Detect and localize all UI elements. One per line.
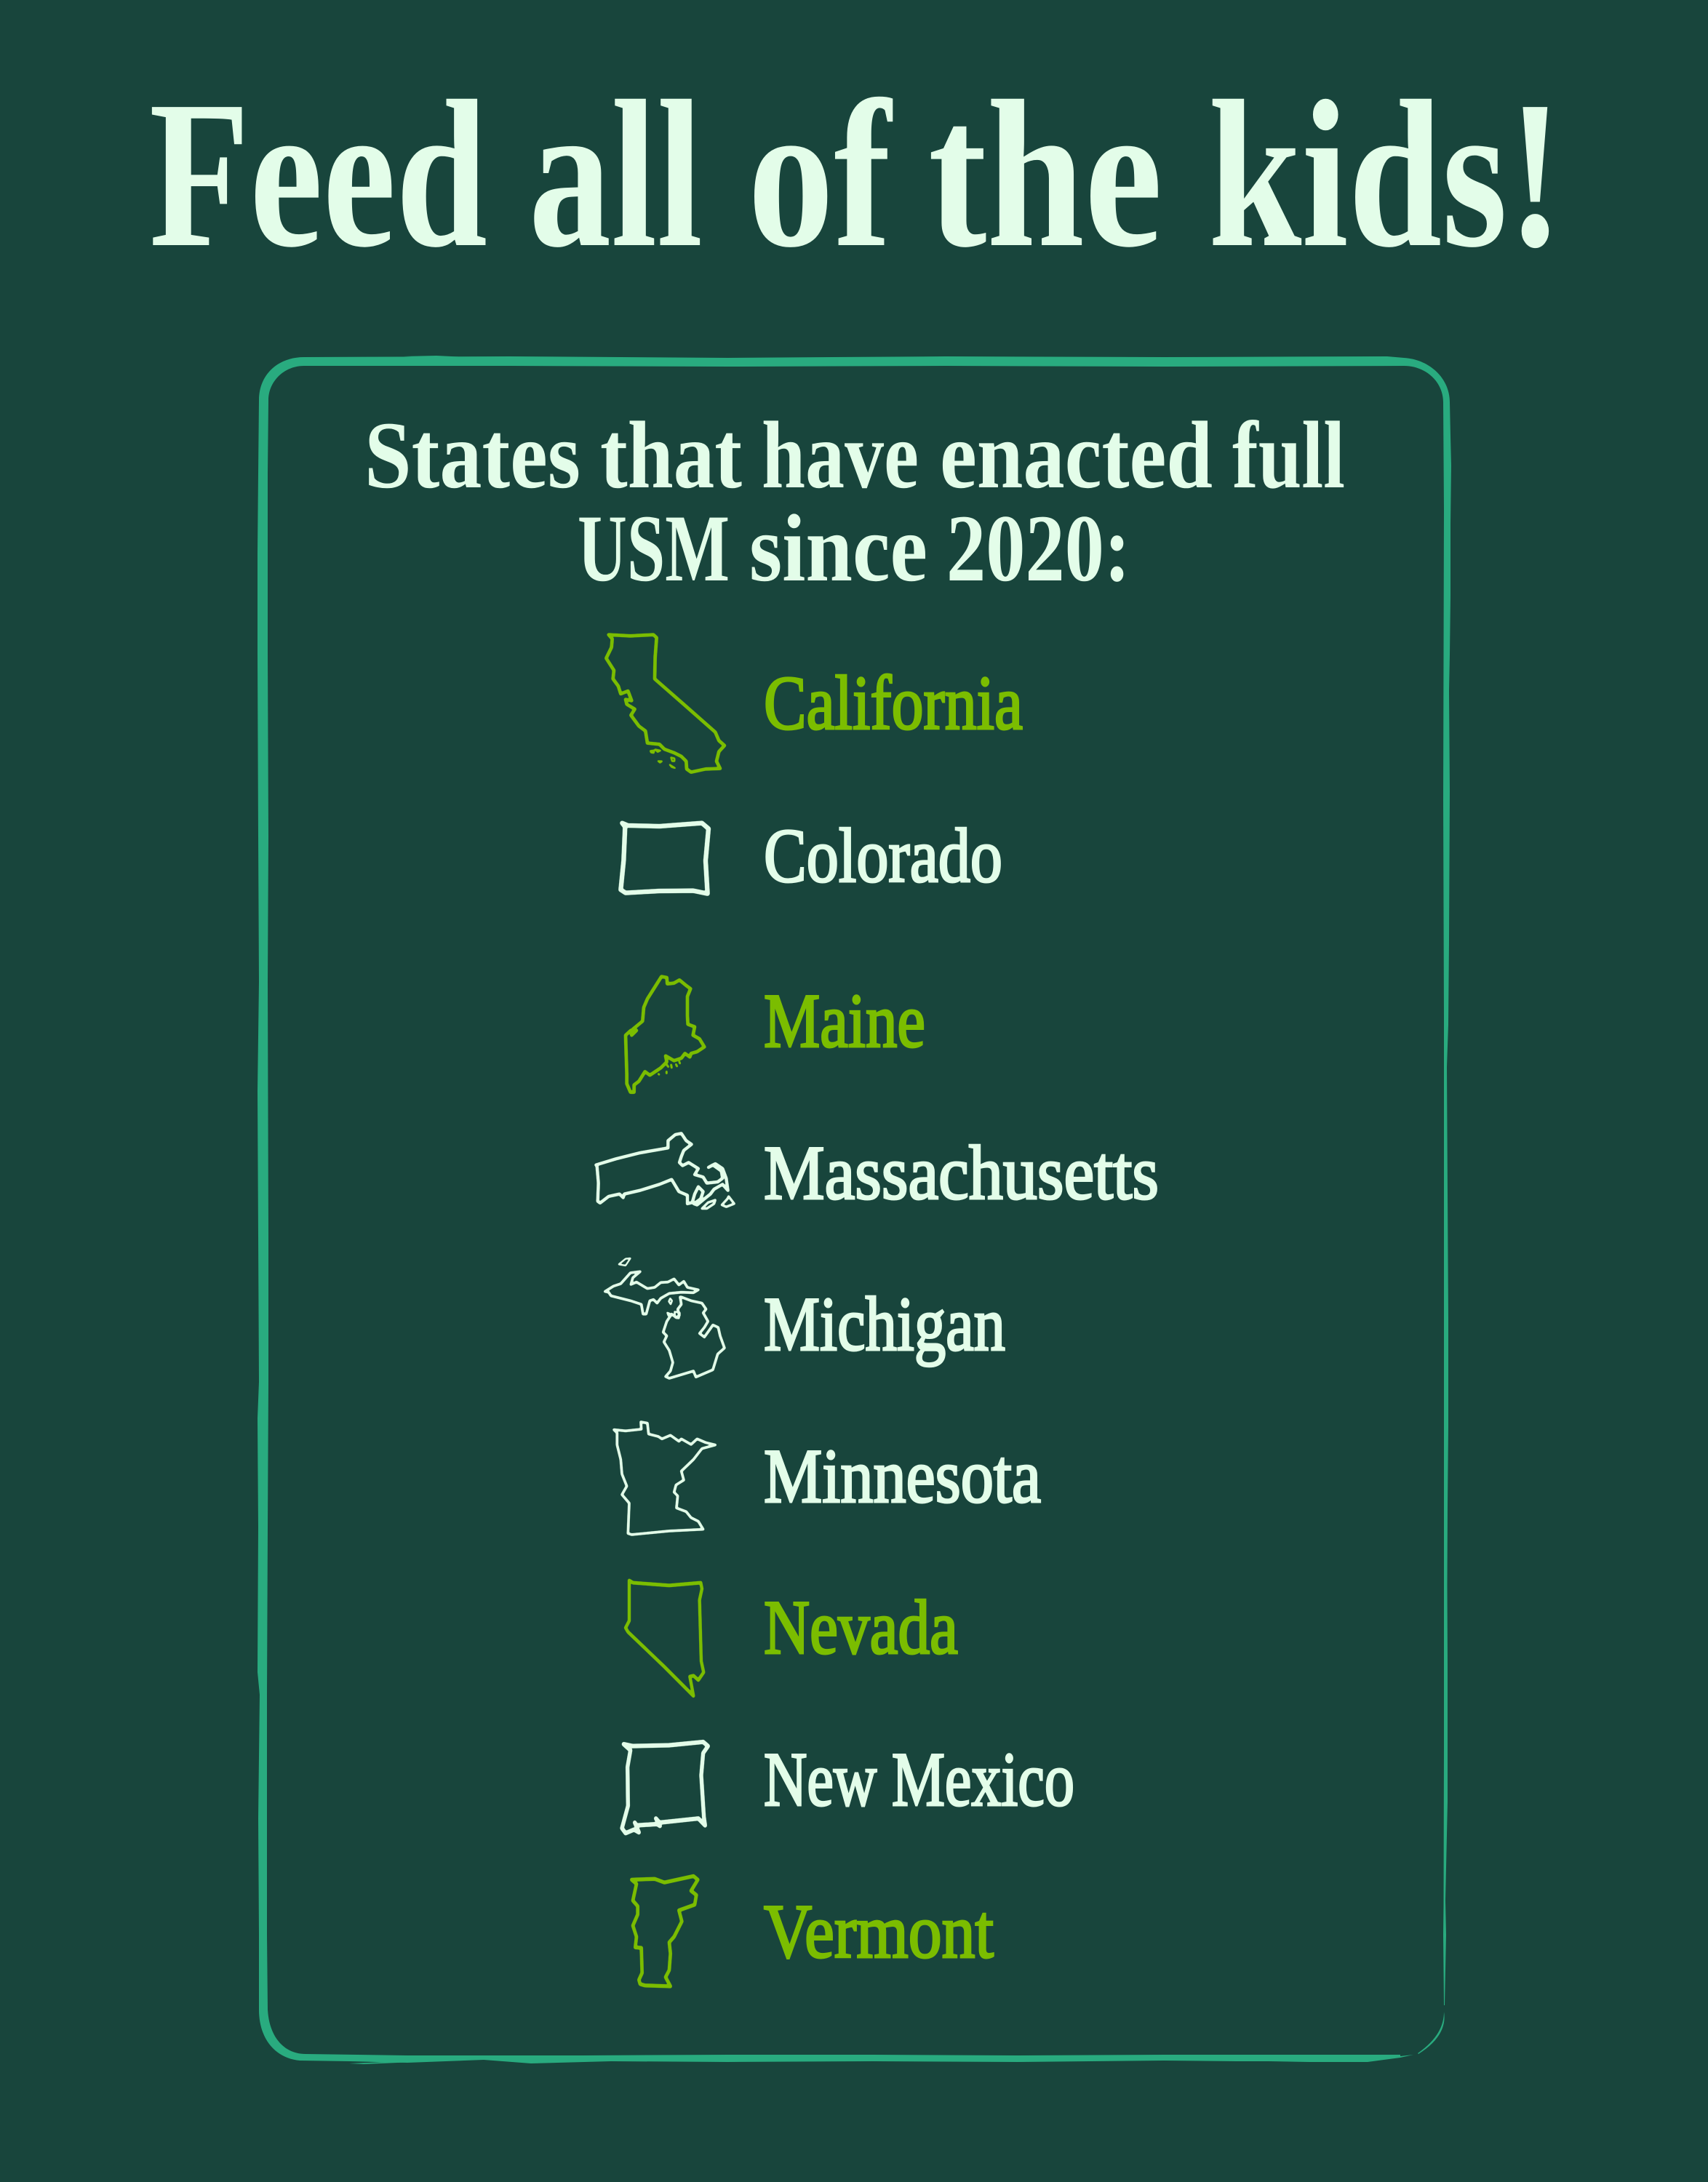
- icon: Maine outline: [626, 977, 704, 1092]
- panel: hand-drawn rounded border: [258, 356, 1451, 2064]
- row: Nevada: [626, 1580, 958, 1696]
- icon: Massachusetts outline: [596, 1133, 734, 1209]
- heading: USM: [578, 495, 730, 602]
- label: Minnesota: Minnesota: [764, 1434, 1041, 1519]
- label: California: California: [764, 660, 1023, 746]
- icon: Minnesota outline: [614, 1422, 715, 1535]
- heading: enacted: [940, 401, 1213, 508]
- row: Minnesota: [614, 1422, 1041, 1535]
- row: Michigan: [605, 1258, 1005, 1378]
- icon: New Mexico outline: [622, 1742, 708, 1833]
- title: [149, 57, 1563, 291]
- icon: Michigan outline: [605, 1258, 725, 1378]
- heading: States: [364, 401, 580, 508]
- title: of: [748, 57, 893, 291]
- heading: since: [749, 495, 927, 602]
- heading: have: [762, 401, 919, 508]
- heading: full: [1232, 401, 1345, 508]
- heading: 2020:: [946, 495, 1130, 602]
- icon: California outline: [606, 635, 725, 772]
- label: Vermont: Vermont: [764, 1889, 994, 1974]
- row: Vermont: [631, 1876, 994, 1986]
- row: California: [606, 635, 1023, 772]
- label: New Mexico: New Mexico: [764, 1737, 1074, 1822]
- icon: Nevada outline: [626, 1580, 703, 1696]
- label: Colorado: Colorado: [764, 813, 1002, 898]
- label: Maine: Maine: [764, 978, 925, 1063]
- heading: that: [600, 401, 742, 508]
- heading: [364, 401, 1345, 602]
- row: Massachusetts: [596, 1130, 1159, 1215]
- label: Michigan: Michigan: [764, 1282, 1005, 1367]
- row: Maine: [626, 977, 925, 1092]
- label: Nevada: Nevada: [764, 1585, 958, 1670]
- row: Colorado: [620, 813, 1002, 898]
- title: Feed: [149, 57, 487, 291]
- title: kids!: [1208, 57, 1563, 291]
- title: the: [928, 57, 1162, 291]
- title: all: [529, 57, 703, 291]
- label: Massachusetts: Massachusetts: [764, 1130, 1159, 1215]
- icon: Vermont outline: [631, 1876, 698, 1986]
- row: New Mexico: [622, 1737, 1074, 1833]
- icon: Colorado outline: [620, 823, 709, 894]
